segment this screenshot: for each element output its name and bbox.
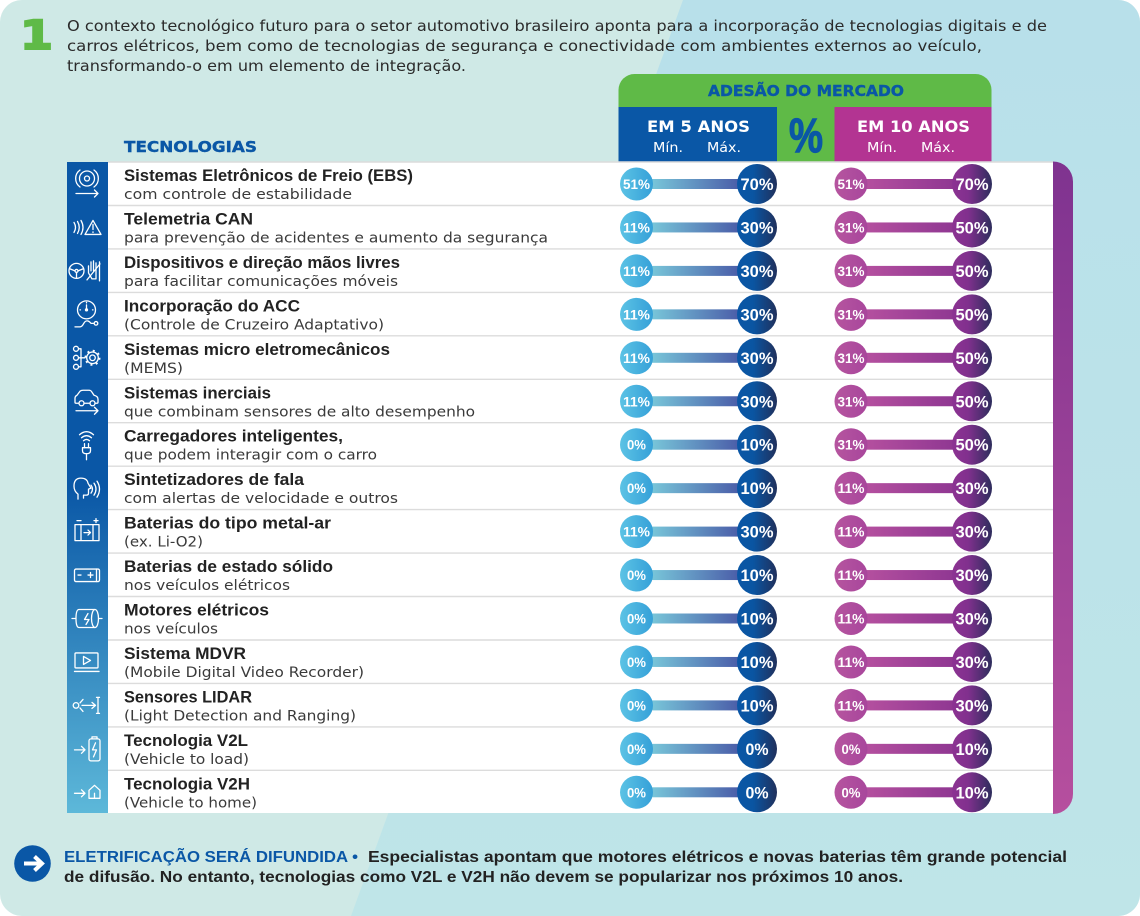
range 5 years bbox=[620, 468, 777, 508]
label: Baterias de estado sólido bbox=[124, 558, 333, 576]
label: (Controle de Cruzeiro Adaptativo) bbox=[124, 317, 384, 333]
row: Carregadores bbox=[80, 425, 992, 465]
label: Dispositivos e direção mãos livres bbox=[124, 254, 400, 272]
range 5 years: 11% bbox=[623, 351, 650, 366]
label: que podem interagir com o carro bbox=[124, 448, 377, 464]
label bbox=[124, 297, 384, 333]
label: Telemetria CAN bbox=[124, 210, 253, 228]
range 5 years: 10% bbox=[740, 436, 774, 455]
icon: arrow to battery bbox=[74, 737, 100, 761]
icon: speedometer bbox=[75, 301, 98, 327]
header: 10 years: EM 10 ANOS bbox=[857, 117, 970, 136]
range 10 years: 50% bbox=[956, 218, 988, 237]
row: estado sólido bbox=[74, 555, 992, 595]
row: Sistemas inerciais bbox=[75, 381, 992, 421]
icon: speaking head bbox=[74, 478, 100, 499]
purple side bar bbox=[1053, 162, 1073, 814]
row: V2L bbox=[74, 729, 992, 769]
range 5 years: 70% bbox=[740, 175, 774, 194]
range 10 years: 11% bbox=[838, 568, 864, 583]
row: MEMS bbox=[74, 338, 992, 378]
range 5 years: 0% bbox=[627, 785, 646, 800]
range 10 years: 31% bbox=[838, 351, 864, 366]
label: para prevenção de acidentes e aumento da segurança bbox=[124, 230, 548, 246]
label: (ex. Li-O2) bbox=[124, 535, 203, 551]
range 5 years: 11% bbox=[623, 394, 650, 409]
range 10 years bbox=[834, 772, 992, 812]
range 10 years: 31% bbox=[838, 220, 864, 235]
icon column band bbox=[67, 162, 108, 813]
range 5 years: 0% bbox=[627, 655, 646, 670]
step number: 1 bbox=[20, 13, 53, 59]
range 10 years: 30% bbox=[956, 566, 988, 585]
range 10 years bbox=[834, 642, 992, 682]
market adoption header bbox=[618, 74, 992, 163]
icon: smart plug bbox=[80, 432, 94, 460]
range 5 years: 0% bbox=[627, 568, 646, 583]
label bbox=[124, 602, 269, 638]
range 5 years bbox=[620, 338, 777, 378]
range 5 years bbox=[620, 425, 777, 465]
range 10 years: 30% bbox=[956, 696, 988, 715]
label bbox=[124, 210, 548, 246]
range 5 years: 11% bbox=[623, 264, 650, 279]
range 5 years: 0% bbox=[627, 742, 646, 757]
conclusion text: Especialistas apontam que motores elétricos e novas baterias têm grande potencial bbox=[368, 849, 1067, 866]
range 10 years: 11% bbox=[838, 655, 864, 670]
range 10 years: 31% bbox=[838, 438, 864, 453]
label: (Mobile Digital Video Recorder) bbox=[124, 665, 364, 681]
range 10 years: 30% bbox=[956, 479, 988, 498]
range 10 years bbox=[834, 294, 992, 334]
range 10 years: 31% bbox=[838, 307, 864, 322]
range 10 years: 30% bbox=[956, 653, 988, 672]
range 10 years: 30% bbox=[956, 610, 988, 628]
range 5 years: 30% bbox=[740, 349, 774, 368]
range 5 years bbox=[620, 207, 777, 247]
range 5 years: 30% bbox=[740, 392, 774, 411]
range 5 years: 10% bbox=[740, 566, 774, 585]
row: MDVR bbox=[74, 642, 992, 682]
header: 5 years: Máx. bbox=[707, 140, 741, 156]
header: 5 years: EM 5 ANOS bbox=[647, 117, 750, 136]
range 5 years: 10% bbox=[740, 696, 774, 715]
range 10 years: 50% bbox=[956, 349, 988, 368]
label: nos veículos elétricos bbox=[124, 578, 290, 594]
label: que combinam sensores de alto desempenho bbox=[124, 404, 475, 420]
range 5 years: 51% bbox=[623, 177, 650, 192]
percent symbol: % bbox=[789, 110, 823, 163]
label bbox=[124, 167, 413, 203]
icon: video screen bbox=[74, 653, 99, 671]
range 10 years bbox=[834, 468, 992, 508]
range 10 years: 50% bbox=[956, 262, 988, 281]
intro text: carros elétricos, bem como de tecnologias de segurança e conectividade com ambientes externos ao veículo, bbox=[67, 37, 982, 55]
range 5 years bbox=[620, 294, 777, 334]
range 10 years bbox=[834, 425, 992, 465]
range 5 years: 30% bbox=[740, 218, 774, 237]
range 5 years: 0% bbox=[627, 698, 646, 713]
row: V2H bbox=[74, 772, 992, 812]
intro text: transformando-o em um elemento de integração. bbox=[67, 57, 466, 75]
range 5 years: 0% bbox=[746, 783, 768, 802]
label: Tecnologia V2H bbox=[124, 775, 250, 793]
row: Motores elétricos bbox=[72, 598, 992, 638]
range 10 years bbox=[834, 338, 992, 378]
label bbox=[124, 384, 475, 420]
label: Tecnologia V2L bbox=[124, 732, 248, 750]
range 10 years: 50% bbox=[956, 436, 988, 455]
range 10 years: 50% bbox=[956, 392, 988, 411]
technologies heading: TECNOLOGIAS bbox=[124, 138, 257, 156]
label bbox=[124, 254, 400, 290]
icon: solid-state battery bbox=[74, 569, 100, 582]
row: Dispositivos bbox=[69, 251, 992, 291]
conclusion text: de difusão. No entanto, tecnologias como V2L e V2H não devem se popularizar nos próximos 10 anos. bbox=[64, 869, 903, 886]
range 10 years bbox=[834, 512, 992, 552]
conclusion text: ELETRIFICAÇÃO SERÁ DIFUNDIDA • bbox=[64, 848, 358, 866]
label: (Vehicle to home) bbox=[124, 795, 257, 811]
label: (Light Detection and Ranging) bbox=[124, 708, 356, 724]
range 5 years: 30% bbox=[740, 523, 774, 542]
range 10 years bbox=[834, 251, 992, 291]
label bbox=[124, 732, 249, 768]
range 5 years bbox=[620, 251, 777, 291]
row: EBS bbox=[76, 164, 992, 204]
range 10 years: 0% bbox=[842, 742, 860, 757]
label: Sistemas Eletrônicos de Freio (EBS) bbox=[124, 167, 413, 185]
label: Sensores LIDAR bbox=[124, 688, 252, 706]
range 10 years: 11% bbox=[838, 698, 864, 713]
icon: electric motor bbox=[72, 610, 102, 628]
range 5 years bbox=[620, 642, 777, 682]
icon: arrow to house bbox=[74, 785, 100, 798]
range 5 years bbox=[620, 164, 777, 204]
range 5 years: 0% bbox=[627, 612, 646, 626]
row: metal-ar bbox=[75, 512, 992, 552]
icon: car and arrow bbox=[75, 390, 98, 414]
range 10 years: 11% bbox=[838, 525, 864, 540]
header: 5 years: Mín. bbox=[653, 140, 683, 156]
label: Carregadores inteligentes, bbox=[124, 428, 343, 446]
market adoption header: ADESÃO DO MERCADO bbox=[708, 81, 904, 100]
label: nos veículos bbox=[124, 622, 218, 638]
range 10 years: 0% bbox=[842, 785, 860, 800]
label: Sistemas micro eletromecânicos bbox=[124, 341, 390, 359]
range 5 years bbox=[620, 598, 777, 638]
range 10 years: 10% bbox=[956, 740, 988, 759]
intro text: O contexto tecnológico futuro para o setor automotivo brasileiro aponta para a incorporação de tecnologias digitais e de bbox=[67, 17, 1047, 35]
range 5 years: 10% bbox=[740, 610, 774, 628]
icon: nodes and gear bbox=[74, 346, 100, 369]
label: Sintetizadores de fala bbox=[124, 471, 305, 489]
icon: brake disc bbox=[76, 170, 98, 197]
range 10 years: 10% bbox=[956, 783, 988, 802]
range 5 years: 0% bbox=[627, 481, 646, 496]
label: Incorporação do ACC bbox=[124, 297, 300, 315]
range 5 years: 30% bbox=[740, 305, 774, 324]
label: Sistemas inerciais bbox=[124, 384, 271, 402]
range 10 years: 31% bbox=[838, 264, 864, 279]
range 10 years bbox=[834, 164, 992, 204]
header: 5 years bbox=[618, 107, 777, 162]
label: (MEMS) bbox=[124, 361, 183, 377]
range 10 years bbox=[834, 685, 992, 725]
range 5 years bbox=[620, 685, 777, 725]
label bbox=[124, 515, 332, 551]
range 5 years: 11% bbox=[623, 220, 650, 235]
header: 10 years: Máx. bbox=[921, 140, 955, 156]
label bbox=[124, 688, 356, 724]
label bbox=[124, 558, 333, 594]
icon: LIDAR sensor bbox=[73, 697, 100, 713]
icon: warning signal bbox=[74, 220, 101, 234]
range 10 years: 31% bbox=[838, 394, 864, 409]
header: 10 years bbox=[834, 107, 992, 162]
label bbox=[124, 775, 257, 811]
label: para facilitar comunicações móveis bbox=[124, 274, 398, 290]
intro text bbox=[67, 17, 1047, 75]
range 10 years bbox=[834, 555, 992, 595]
range 10 years: 50% bbox=[956, 305, 988, 324]
label: com alertas de velocidade e outros bbox=[124, 491, 398, 507]
label bbox=[124, 645, 364, 681]
range 10 years bbox=[834, 729, 992, 769]
range 5 years bbox=[620, 555, 777, 595]
label: Motores elétricos bbox=[124, 602, 269, 620]
range 10 years: 11% bbox=[838, 481, 864, 496]
range 10 years: 11% bbox=[838, 612, 864, 626]
label bbox=[124, 341, 390, 377]
range 10 years: 30% bbox=[956, 523, 988, 542]
table panel bbox=[67, 162, 1073, 814]
icon: metal-air battery bbox=[75, 519, 99, 541]
row: LIDAR bbox=[73, 685, 992, 725]
range 10 years bbox=[834, 207, 992, 247]
range 5 years bbox=[620, 729, 777, 769]
icon: arrow circle bbox=[14, 845, 51, 882]
label: Sistema MDVR bbox=[124, 645, 246, 663]
label bbox=[124, 428, 377, 464]
range 5 years: 10% bbox=[740, 479, 774, 498]
range 10 years: 70% bbox=[956, 175, 988, 194]
label bbox=[124, 471, 398, 507]
range 5 years: 0% bbox=[627, 438, 646, 453]
range 10 years: 51% bbox=[838, 177, 864, 192]
range 5 years bbox=[620, 381, 777, 421]
range 5 years: 11% bbox=[623, 307, 650, 322]
row: ACC bbox=[75, 294, 992, 334]
label: com controle de estabilidade bbox=[124, 187, 352, 203]
label: Baterias do tipo metal-ar bbox=[124, 515, 332, 533]
row: Sintetizadores bbox=[74, 468, 992, 508]
range 5 years: 30% bbox=[740, 262, 774, 281]
conclusion text bbox=[64, 848, 1067, 886]
range 10 years bbox=[834, 598, 992, 638]
range 10 years bbox=[834, 381, 992, 421]
icon: steering wheel and hand bbox=[69, 261, 100, 281]
label: (Vehicle to load) bbox=[124, 752, 249, 768]
range 5 years: 10% bbox=[740, 653, 774, 672]
range 5 years bbox=[620, 772, 777, 812]
row: Telemetria CAN bbox=[74, 207, 992, 247]
range 5 years bbox=[620, 512, 777, 552]
header: 10 years: Mín. bbox=[867, 140, 897, 156]
range 5 years: 0% bbox=[746, 740, 768, 759]
range 5 years: 11% bbox=[623, 525, 650, 540]
